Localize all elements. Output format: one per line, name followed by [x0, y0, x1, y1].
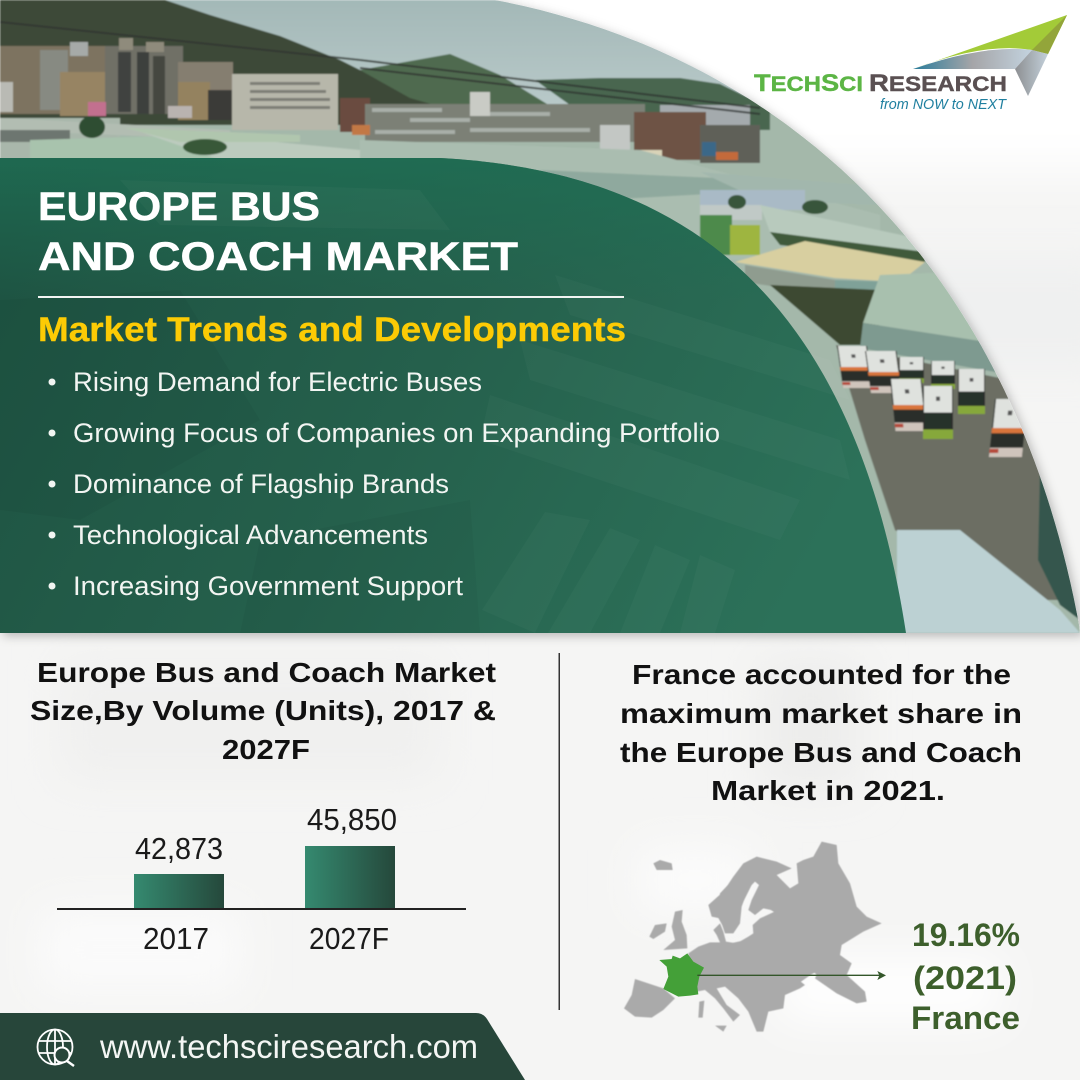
- callout text: the Europe Bus and Coach: [620, 737, 1022, 768]
- bullet list: market trends: Rising Demand for Electric Buses: [73, 367, 482, 397]
- bullet list: market trends: Increasing Government Support: [73, 571, 463, 601]
- logo: TechSci Research: [754, 15, 1067, 113]
- title: AND COACH MARKET: [38, 235, 518, 279]
- callout text: [620, 659, 1022, 806]
- callout text: France accounted for the: [632, 659, 1011, 690]
- France statistic: (2021): [913, 960, 1017, 996]
- map of Europe with France highlighted: [624, 842, 886, 1032]
- panel: market size chart: [30, 657, 496, 956]
- title: [38, 185, 518, 279]
- chart heading: 2027F: [222, 734, 310, 765]
- logo: TechSci Research: from NOW to NEXT: [880, 97, 1007, 113]
- panel: France market share: [620, 659, 1022, 1036]
- photo: bus depot and city: [0, 0, 1080, 640]
- mountains: [0, 0, 770, 130]
- chart heading: [30, 657, 496, 765]
- bar chart: 42,873: [135, 831, 223, 866]
- bar chart: [57, 802, 466, 956]
- France statistic: 19.16%: [912, 917, 1020, 953]
- bullet list: market trends: [48, 367, 720, 601]
- dark cables: [0, 22, 760, 114]
- depot yard: [836, 345, 1080, 620]
- white curve shadow: [0, 0, 1080, 633]
- roofs: [0, 116, 1012, 375]
- bar chart: 2027F: [309, 921, 389, 956]
- subtitle: Market Trends and Developments: [38, 311, 626, 349]
- France statistic: [911, 917, 1020, 1036]
- France statistic: France: [911, 1000, 1020, 1036]
- bullet list: market trends: Dominance of Flagship Brands: [73, 469, 449, 499]
- bar chart: 2017: [143, 921, 209, 956]
- logo: TechSci Research: TECHSCI: [754, 70, 863, 97]
- footer bar: [0, 1013, 525, 1080]
- chart heading: Size,By Volume (Units), 2017 &: [30, 695, 496, 726]
- chart heading: Europe Bus and Coach Market: [37, 657, 496, 688]
- bullet list: market trends: Technological Advancements: [73, 520, 428, 550]
- logo: TechSci Research: RESEARCH: [869, 70, 1007, 97]
- city buildings: [0, 38, 760, 163]
- bar chart: 45,850: [307, 802, 397, 837]
- panel: green title panel: [0, 158, 906, 633]
- bullet list: market trends: Growing Focus of Companies on Expanding Portfolio: [73, 418, 720, 448]
- website URL: www.techsciresearch.com: [99, 1028, 478, 1065]
- buses: [837, 346, 1028, 457]
- title: EUROPE BUS: [38, 185, 320, 229]
- icon: globe with magnifier: [38, 1030, 74, 1066]
- callout text: maximum market share in: [620, 698, 1022, 729]
- foreground roof: [897, 530, 1080, 633]
- sky: [168, 0, 746, 104]
- callout text: Market in 2021.: [711, 775, 945, 806]
